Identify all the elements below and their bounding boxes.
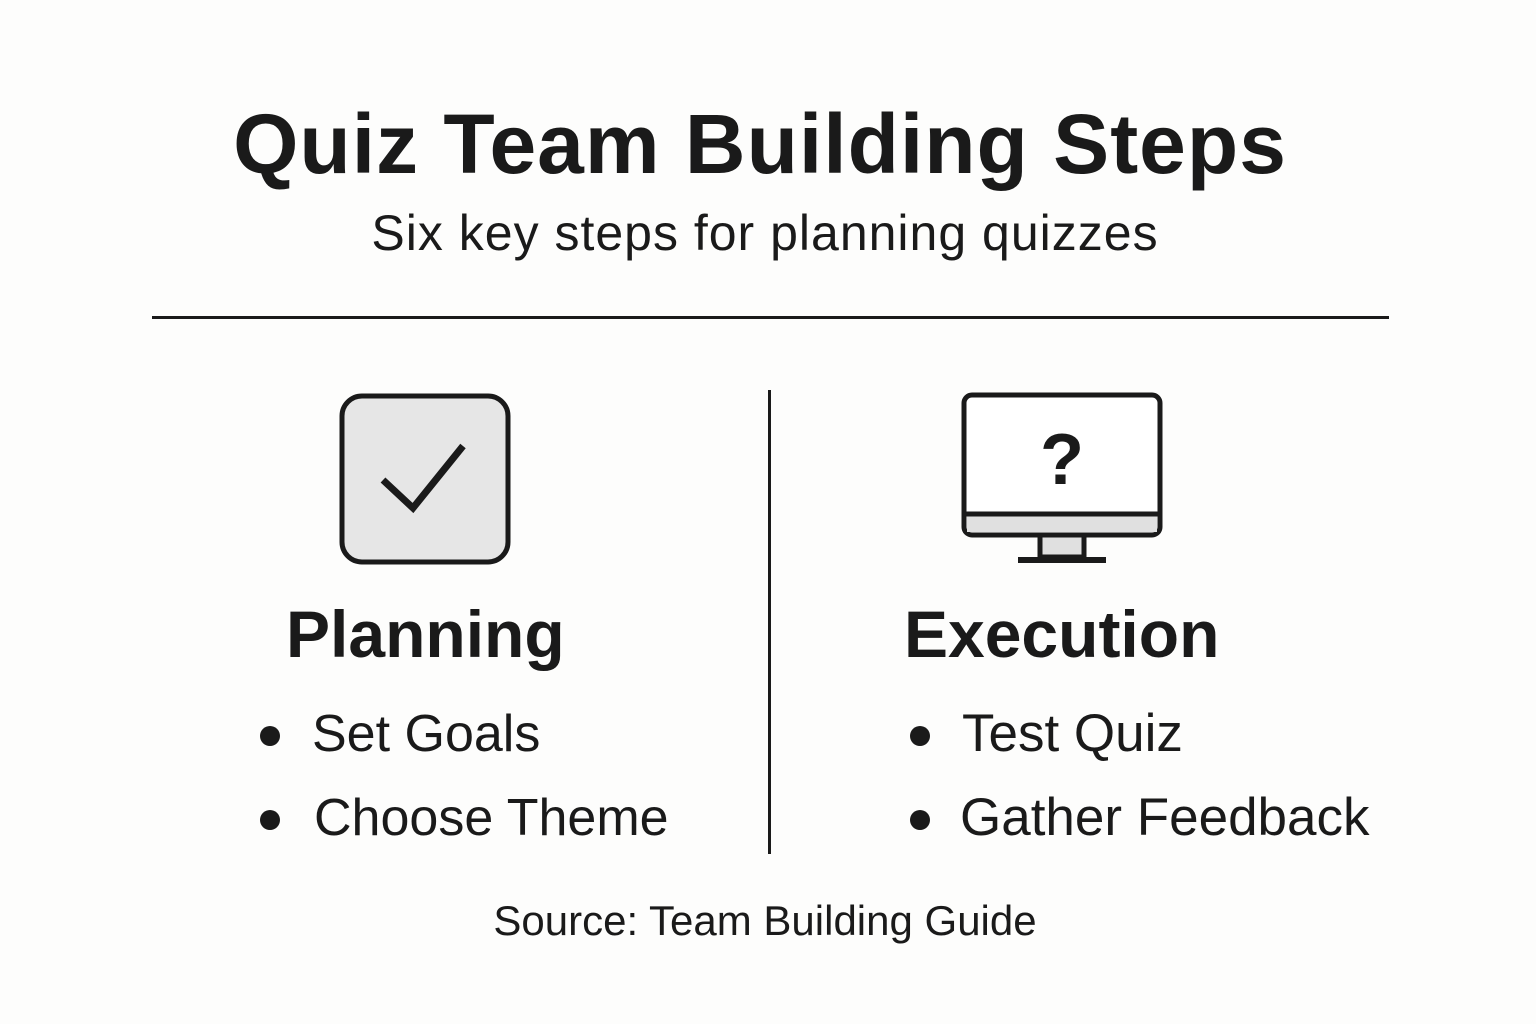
panel: planning: [260, 394, 669, 847]
subtitle: Six key steps for planning quizzes: [371, 205, 1159, 261]
title: Quiz Team Building Steps: [233, 97, 1287, 191]
icon: checkbox: [340, 394, 510, 564]
heading: Execution: Execution: [904, 597, 1219, 671]
list: planning items: Set Goals: [312, 705, 540, 763]
list: planning items: [260, 705, 669, 847]
list: planning items: Choose Theme: [314, 789, 669, 847]
list: execution items: [910, 704, 1370, 847]
list: execution items: Gather Feedback: [960, 788, 1370, 847]
source: Source: Team Building Guide: [493, 897, 1037, 944]
icon: monitor: [962, 392, 1162, 563]
icon: monitor: ?: [1040, 420, 1084, 500]
heading: Planning: Planning: [286, 597, 565, 671]
list: execution items: Test Quiz: [962, 704, 1183, 763]
panel: execution: [904, 392, 1370, 847]
